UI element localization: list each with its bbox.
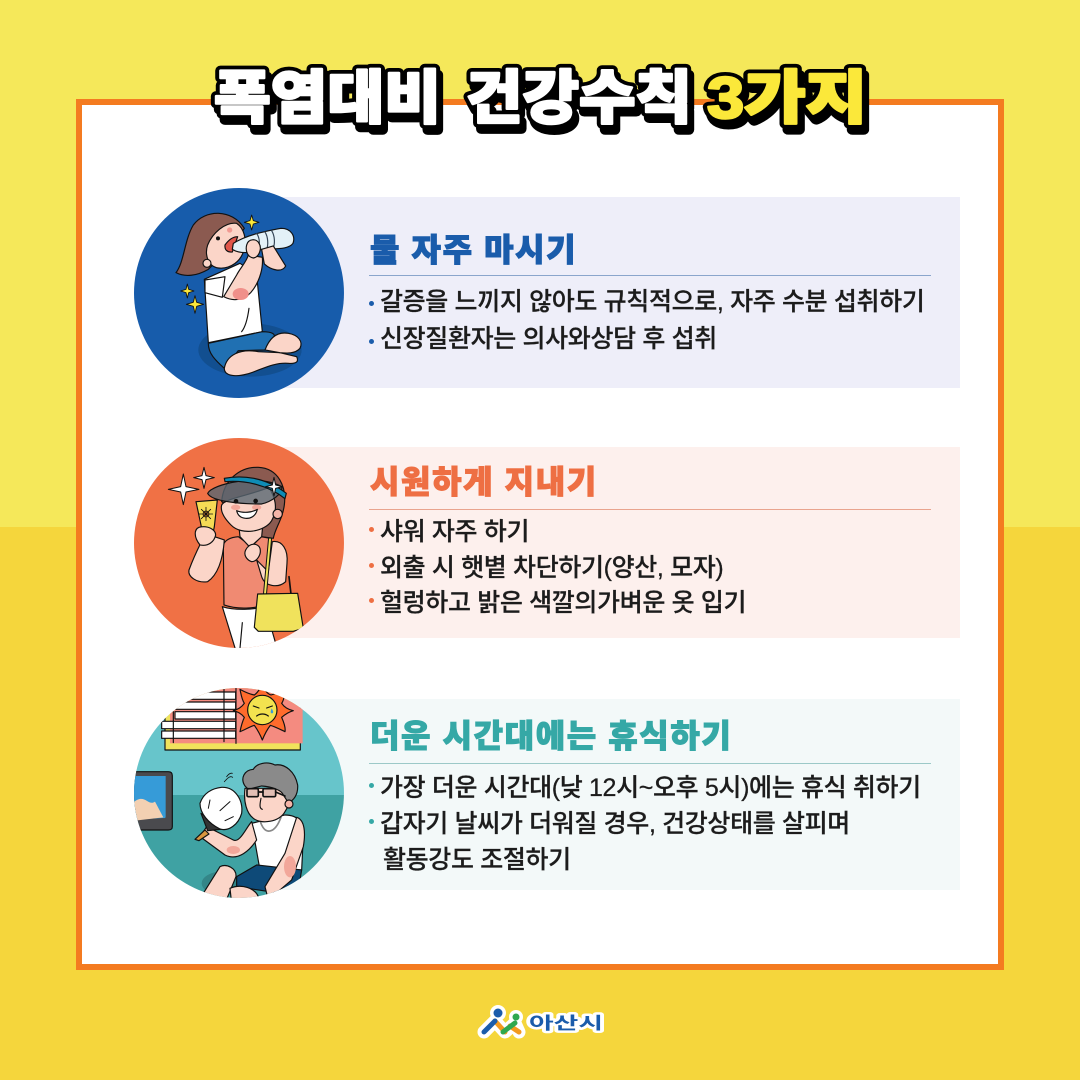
logo text: 아산시 bbox=[529, 1014, 603, 1033]
title: 폭염대비 bbox=[214, 66, 441, 131]
text: drink water item 2: 신장질환자는 의사와상담 후 섭취 bbox=[380, 325, 717, 353]
background: upper yellow band bbox=[0, 0, 1080, 527]
text: rest item 2: 갑자기 날씨가 더워질 경우, 건강상태를 살피며 bbox=[380, 810, 850, 838]
title: 3가지 bbox=[707, 66, 867, 131]
title: 건강수칙 bbox=[466, 66, 692, 131]
text: stay cool item 1: 샤워 자주 하기 bbox=[380, 518, 529, 546]
panel: stay cool bbox=[240, 447, 960, 638]
title bbox=[210, 64, 870, 137]
icon: logo mark bbox=[484, 1005, 523, 1032]
icon: girl drinking water bbox=[134, 188, 344, 398]
text: stay cool item 3: 헐렁하고 밝은 색깔의가벼운 옷 입기 bbox=[380, 589, 746, 617]
orange frame with white panel bbox=[76, 99, 1004, 970]
logo: Asan City bbox=[484, 1005, 603, 1033]
text: stay cool item 2: 외출 시 햇볕 차단하기(양산, 모자) bbox=[380, 554, 723, 582]
heading: drink water: 물 자주 마시기 bbox=[370, 232, 577, 268]
icon: woman with sunscreen and visor bbox=[134, 438, 344, 653]
text: drink water item 1: 갈증을 느끼지 않아도 규칙적으로, 자주 수분 섭취하기 bbox=[380, 288, 924, 316]
heading: rest: 더운 시간대에는 휴식하기 bbox=[370, 718, 732, 754]
text: rest item 1: 가장 더운 시간대(낮 12시~오후 5시)에는 휴식 취하기 bbox=[380, 774, 921, 802]
title: 3가지 bbox=[707, 66, 867, 131]
title: 폭염대비 bbox=[217, 72, 444, 137]
panel: drink water bbox=[240, 197, 960, 388]
title: 폭염대비 bbox=[214, 66, 441, 131]
title: 건강수칙 bbox=[469, 72, 695, 137]
heading: stay cool: 시원하게 지내기 bbox=[370, 464, 598, 500]
title: 3가지 bbox=[710, 72, 870, 137]
title: 건강수칙 bbox=[466, 66, 692, 131]
text: rest item 2 continued: 활동강도 조절하기 bbox=[383, 846, 571, 874]
panel: rest bbox=[240, 699, 960, 890]
icon: elderly man fanning under a hot window bbox=[134, 688, 344, 898]
